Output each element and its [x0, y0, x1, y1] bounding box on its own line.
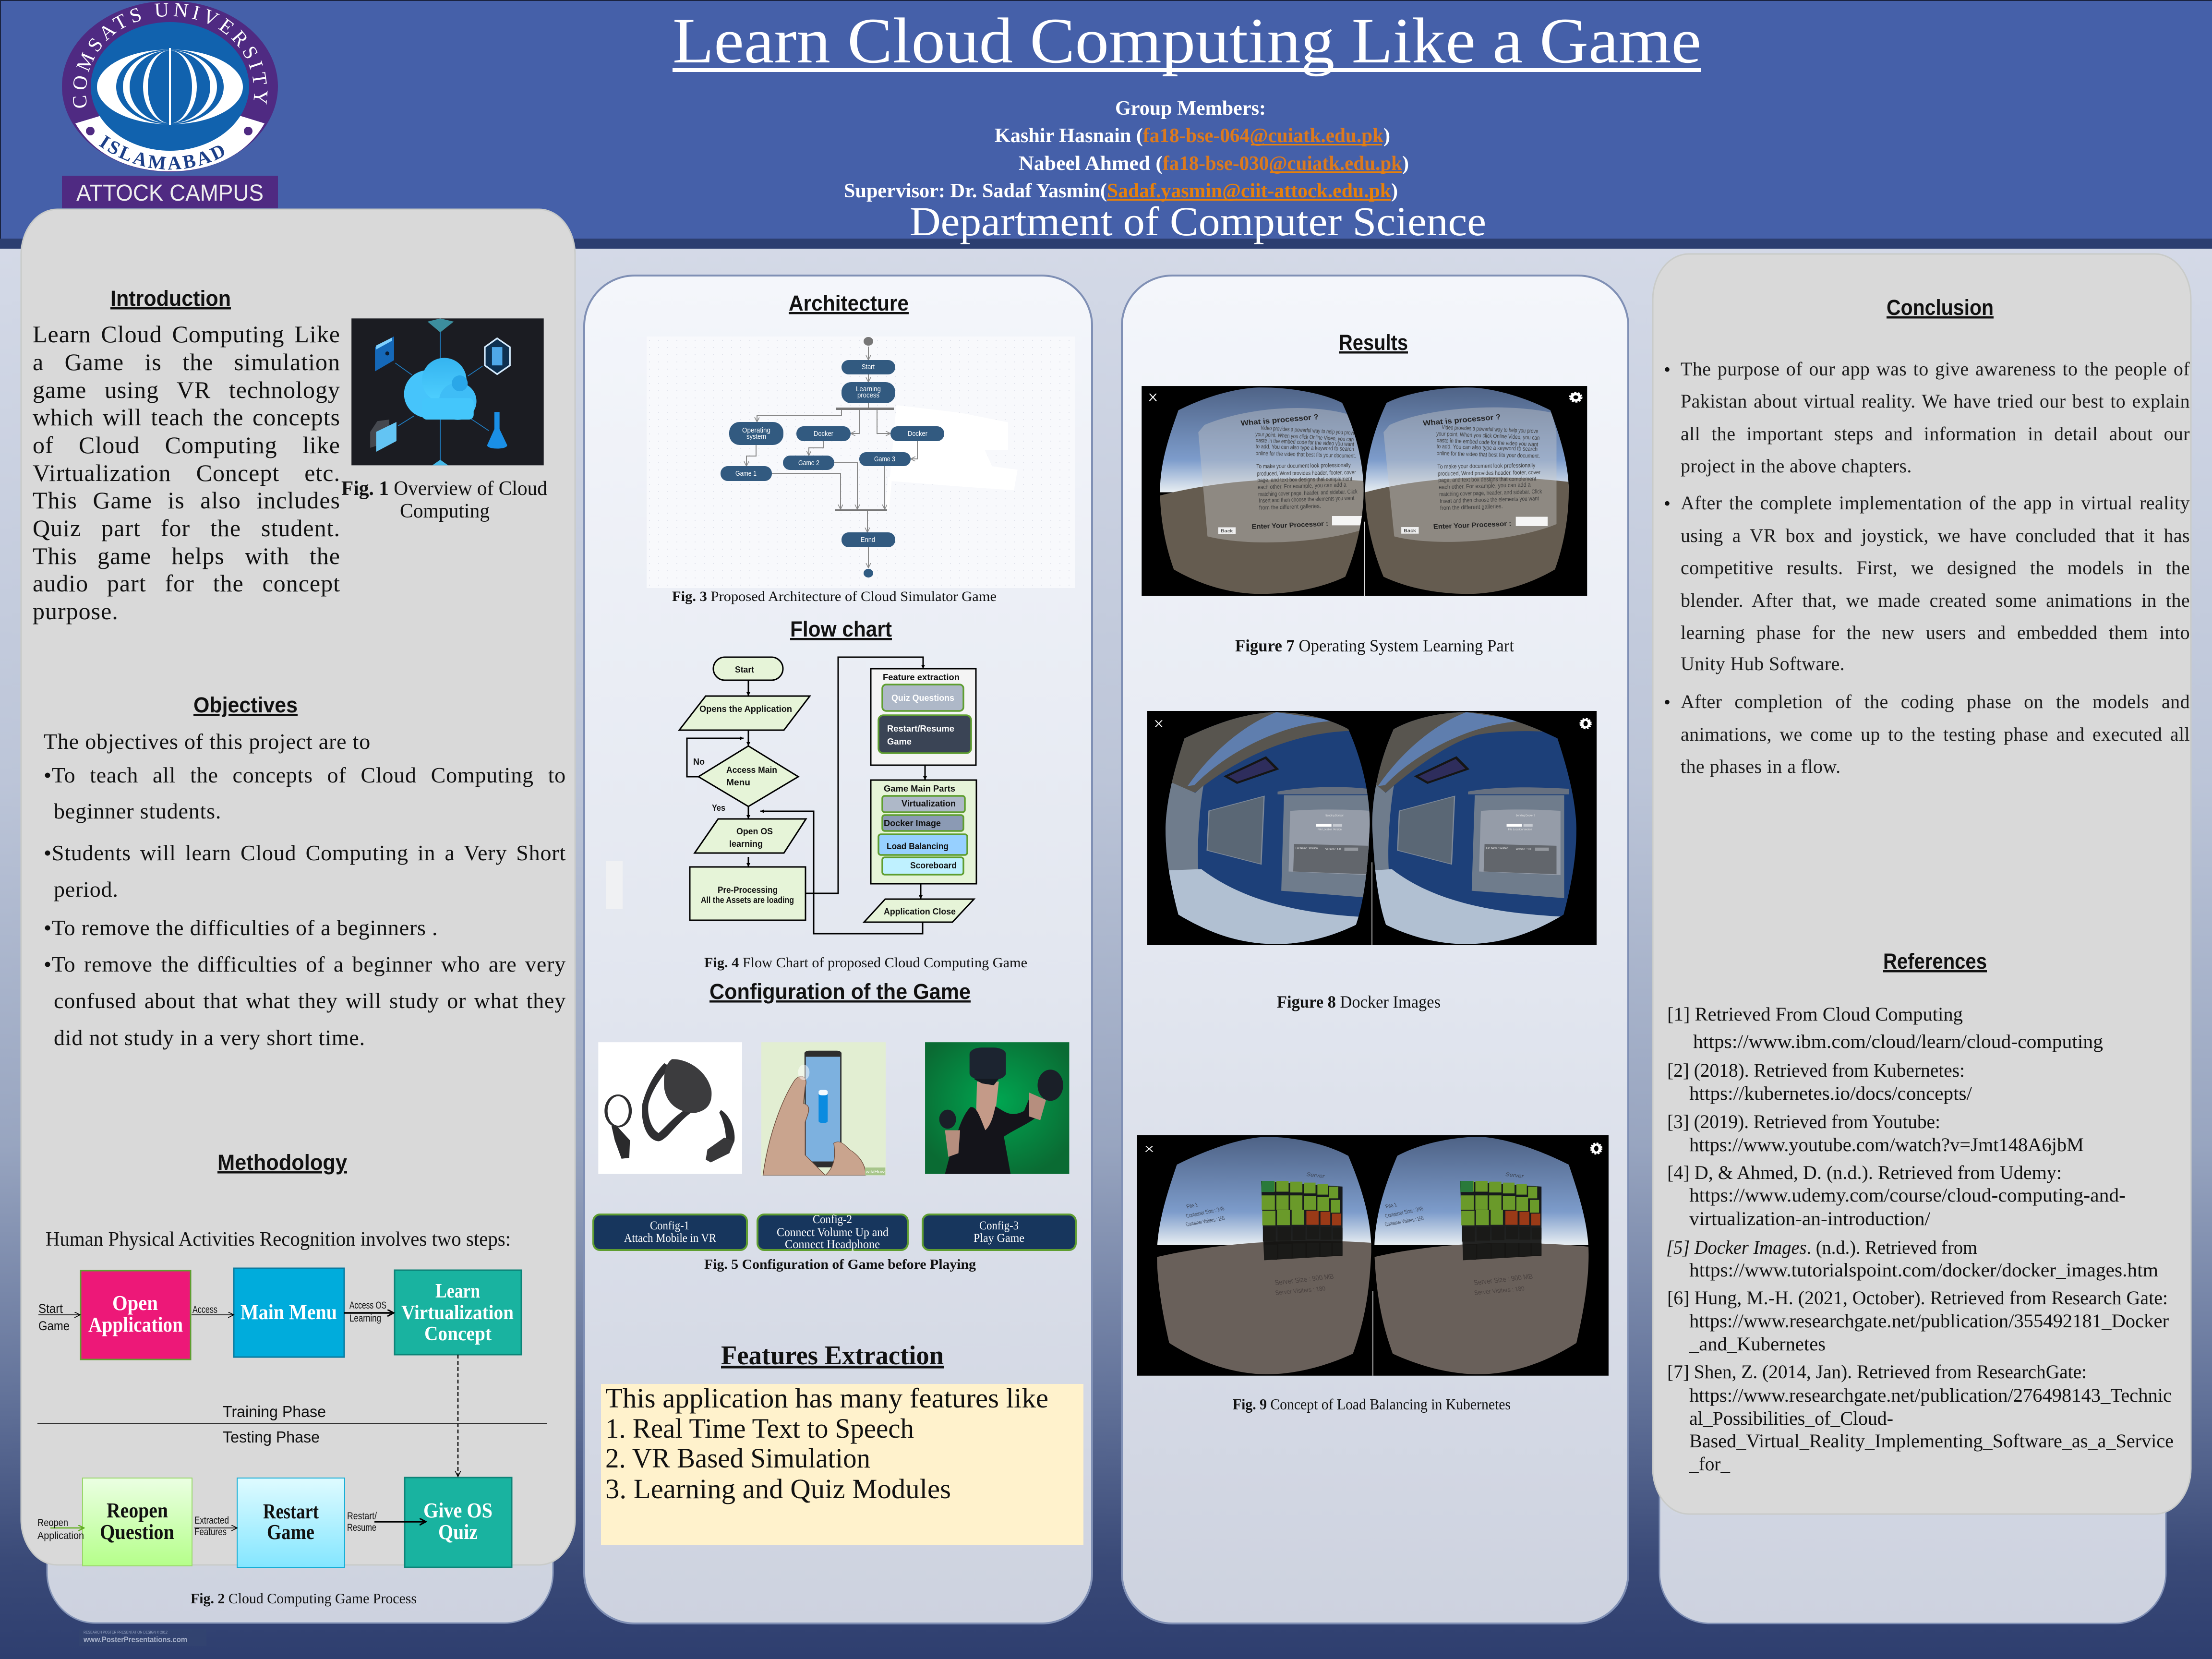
caption: figure 8: Figure 8 Docker Images [1277, 992, 1441, 1011]
figure 7: VR operating system learning screenshot: Enter Your Processor : [1433, 520, 1512, 531]
group members: Kashir Hasnain ( [995, 125, 1143, 147]
footer: poster presentations credit: www.PosterPresentations.com [83, 1635, 187, 1644]
flowchart: figure 4 [606, 657, 976, 934]
box: learn virtualization concept: Virtualization [401, 1302, 514, 1324]
caption: figure 5: Fig. 5 Configuration of Game before Playing [704, 1257, 976, 1272]
text block: conclusion paragraphs: blender. After that, we made created some animations in the [1681, 589, 2190, 611]
flowchart: figure 4: Load Balancing [887, 842, 949, 851]
flowchart: figure 4: Menu [726, 778, 750, 787]
arrow labels: Features [194, 1527, 227, 1538]
caption: figure 4: Fig. 4 Flow Chart of proposed Cloud Computing Game [704, 955, 1027, 971]
figure 9: VR load balancing screenshot: Container Visiters : 150 [1384, 1215, 1425, 1228]
flowchart: figure 4: Docker Image [884, 818, 941, 828]
box: learn virtualization concept: Learn [435, 1280, 480, 1302]
arrow labels: Reopen [37, 1517, 68, 1528]
config button 1: Config-1 [650, 1219, 689, 1232]
figure 8: VR docker images screenshot: File Location Version [1508, 828, 1532, 831]
heading: architecture: Architecture [789, 291, 909, 315]
references list: https://www.ibm.com/cloud/learn/cloud-computing [1693, 1031, 2103, 1052]
figure 9: VR load balancing screenshot: Server [1306, 1171, 1325, 1179]
arrow labels: Start [38, 1301, 63, 1316]
architecture diagram: figure 3: Game 3 [874, 455, 895, 463]
figure 8: VR docker images screenshot: Sending Docker ! [1325, 814, 1344, 817]
figure 7: VR operating system learning screenshot: online for the video that best fits your document. [1436, 449, 1540, 459]
references list: _for_ [1689, 1453, 1731, 1475]
logo: COMSATS University: COMSATS UNIVERSITY [73, 3, 268, 108]
architecture diagram: figure 3: process [857, 391, 879, 399]
features callout [601, 1382, 1083, 1545]
group members: Sadaf.yasmin@ciit-attock.edu.pk [1107, 180, 1392, 202]
arrow labels: Extracted [194, 1515, 229, 1526]
text block: conclusion paragraphs: project in the above chapters. [1681, 455, 1912, 477]
config button 3: Play Game [974, 1232, 1024, 1245]
text block: conclusion paragraphs: the phases in a flow. [1681, 756, 1840, 777]
references list: [2] (2018). Retrieved from Kubernetes: [1667, 1059, 1965, 1081]
panel: conclusion backing [1659, 276, 2166, 1623]
caption: figure 1: Computing [400, 500, 490, 522]
box: restart game: Game [267, 1520, 314, 1544]
references list: https://www.researchgate.net/publication/276498143_Technic [1689, 1384, 2172, 1406]
architecture diagram: figure 3: Ennd [861, 536, 875, 544]
panel: conclusion and references [1653, 254, 2191, 1514]
text block: conclusion paragraphs: The purpose of our app was to give awareness to the people of [1681, 358, 2190, 380]
box: open application [81, 1271, 191, 1359]
figure 7: VR operating system learning screenshot: Video provides a powerful way to help you prove [1261, 424, 1356, 436]
figure 7: VR operating system learning screenshot: matching cover page, header, and sidebar. Click [1258, 488, 1358, 497]
text block: objectives list: •To remove the difficulties of a beginner who are very [44, 952, 566, 976]
flowchart: figure 4: Scoreboard [910, 861, 957, 870]
text block: conclusion paragraphs: using a VR box and joystick, we have concluded that it has [1681, 525, 2190, 546]
text block: conclusion paragraphs: After completion of the coding phase on the models and [1681, 691, 2190, 712]
references list: virtualization-an-introduction/ [1689, 1208, 1931, 1229]
department heading: Department of Computer Science [910, 198, 1486, 244]
figure 7: VR operating system learning screenshot: each other. For example, you can add a [1257, 481, 1346, 491]
group members: ) [1391, 180, 1398, 202]
methodology intro line: Human Physical Activities Recognition involves two steps: [46, 1228, 511, 1250]
group members: Group Members: [1115, 97, 1266, 120]
text block: introduction paragraph: a Game is the simulation [33, 349, 340, 375]
text block: objectives list: The objectives of this project are to [44, 729, 371, 754]
text block: conclusion paragraphs: Pakistan about virtual reality. We have tried our best to explain [1681, 390, 2190, 412]
figure 7: VR operating system learning screenshot: page, and text box designs that complement [1257, 475, 1352, 483]
flowchart: figure 4: learning [729, 839, 763, 849]
box: open application: Application [88, 1313, 183, 1336]
architecture diagram: figure 3: Docker [814, 430, 833, 438]
text block: introduction paragraph [33, 321, 340, 625]
text block: introduction paragraph: This game helps with the [33, 542, 340, 569]
figure 7: VR operating system learning screenshot: paste in the embed code for the video you want [1255, 436, 1354, 447]
figure 9: VR load balancing screenshot: Container Size : 243 [1383, 1205, 1425, 1219]
box: learn virtualization concept: Concept [424, 1323, 492, 1345]
panel: figure 2 backing [47, 275, 553, 1623]
text block: conclusion paragraphs: After the complete implementation of the app in virtual reality [1681, 492, 2190, 514]
figure 7: VR operating system learning screenshot: each other. For example, you can add a [1439, 481, 1531, 491]
architecture diagram: figure 3: Learning [856, 385, 881, 393]
figure 7: VR operating system learning screenshot: online for the video that best fits your document. [1255, 449, 1356, 459]
text block: conclusion paragraphs: Unity Hub Software. [1681, 653, 1845, 674]
features callout: 2. VR Based Simulation [605, 1443, 870, 1474]
heading: flow chart: Flow chart [790, 617, 892, 641]
text block: introduction paragraph: Quiz part for the student. [33, 515, 340, 541]
config button 2: Connect Headphone [785, 1238, 880, 1251]
box: restart game [237, 1478, 345, 1567]
figure 9: VR load balancing screenshot: Server Size : 900 MB [1473, 1273, 1534, 1287]
box: learn virtualization concept [395, 1270, 521, 1355]
references list: Based_Virtual_Reality_Implementing_Software_as_a_Service [1689, 1430, 2174, 1452]
heading: results: Results [1339, 330, 1408, 355]
text block: conclusion paragraphs [1681, 0, 2190, 792]
conclusion bullets [1664, 359, 1671, 713]
text block: objectives list: •Students will learn Cloud Computing in a Very Short [44, 841, 566, 865]
arrow labels: Access [192, 1304, 217, 1315]
flowchart: figure 4: Opens the Application [699, 704, 792, 714]
heading: references: References [1883, 949, 1987, 974]
arrows [37, 1313, 547, 1528]
conclusion bullets: • [1664, 359, 1671, 380]
references list: [4] D, & Ahmed, D. (n.d.). Retrieved from Udemy: [1667, 1162, 2062, 1183]
arrow labels: Training Phase [223, 1403, 326, 1420]
box: reopen question: Question [100, 1520, 174, 1544]
box: reopen question [83, 1478, 192, 1566]
figure 9: VR load balancing screenshot: Server Visiters : 180 [1274, 1285, 1326, 1297]
architecture diagram: figure 3: Docker [908, 430, 927, 438]
figure 7: VR operating system learning screenshot: To make your document look professionally [1437, 462, 1536, 470]
arrow labels: Learning [349, 1313, 381, 1324]
group members: ) [1402, 153, 1409, 175]
config button 1 [593, 1214, 747, 1250]
footer: poster presentations credit: RESEARCH POSTER PRESENTATION DESIGN © 2012 [84, 1630, 168, 1635]
caption: figure 1 [341, 478, 547, 522]
flowchart: figure 4: Application Close [884, 907, 956, 916]
image: person playing in VR [925, 1042, 1069, 1174]
architecture diagram: figure 3: Start [862, 363, 875, 371]
references list: al_Possibilities_of_Cloud- [1689, 1407, 1893, 1429]
group members: Supervisor: Dr. Sadaf Yasmin( [844, 180, 1107, 202]
flowchart: figure 4: Access Main [726, 765, 777, 775]
text block: introduction paragraph: This Game is also includes [33, 487, 340, 514]
figure 9: VR load balancing screenshot: X [1145, 1144, 1154, 1154]
figure 8: VR docker images screenshot: File Name : location [1486, 846, 1508, 850]
text block: objectives list: beginner students. [54, 799, 221, 823]
architecture diagram: figure 3: system [746, 433, 766, 441]
figure 1: cloud overview image [351, 318, 544, 465]
figure 8: VR docker images screenshot [1147, 711, 1597, 946]
figure 7: VR operating system learning screenshot: from the different galleries. [1259, 503, 1321, 511]
process diagram: figure 2 [37, 1268, 547, 1567]
group members: fa18-bse-064@cuiatk.edu.pk [1143, 125, 1384, 147]
text block: conclusion paragraphs: competitive results. First, we designed the models in the [1681, 557, 2190, 578]
figure 7: VR operating system learning screenshot: your point. When you click Online Video, you can [1255, 431, 1354, 443]
logo: COMSATS University [62, 1, 278, 208]
text block: objectives list: confused about that what they will study or what they [54, 988, 566, 1013]
references list: [5] Docker Images. (n.d.). Retrieved from [1666, 1237, 1977, 1258]
text block: conclusion paragraphs: animations, we come up to the testing phase and executed all [1681, 723, 2190, 745]
config button 2 [757, 1213, 908, 1251]
flowchart: figure 4: Quiz Questions [891, 693, 954, 703]
figure 7: VR operating system learning screenshot: What is processor ? [1240, 412, 1319, 427]
panel: architecture column [584, 276, 1092, 1623]
flowchart: figure 4: Open OS [736, 827, 773, 836]
figure 9: VR load balancing screenshot: Container Size : 243 [1185, 1205, 1226, 1219]
box: main menu [234, 1268, 344, 1357]
flowchart: figure 4: Start [735, 665, 754, 674]
references list: [3] (2019). Retrieved from Youtube: [1667, 1111, 1940, 1132]
panel: introduction, objectives, methodology [21, 209, 575, 1565]
image: phone volume button: wikiHow [866, 1169, 885, 1174]
figure 7: VR operating system learning screenshot: Back [1221, 529, 1233, 534]
figure 8: VR docker images screenshot: File Location Version [1318, 828, 1342, 831]
flowchart: figure 4: Yes [712, 803, 725, 813]
text block: introduction paragraph: of Cloud Computing like [33, 432, 340, 458]
box: give os quiz [405, 1478, 512, 1567]
text block: introduction paragraph: audio part for the concept [33, 570, 340, 597]
figure 7: VR operating system learning screenshot: page, and text box designs that complement [1438, 475, 1537, 483]
text block: introduction paragraph: Learn Cloud Computing Like [33, 321, 340, 348]
flowchart: figure 4: No [693, 757, 705, 767]
config button 2: Connect Volume Up and [777, 1226, 889, 1239]
architecture diagram: figure 3 [647, 337, 1075, 588]
figure 7: VR operating system learning screenshot: What is processor ? [1422, 412, 1501, 427]
flowchart: figure 4: Feature extraction [883, 673, 960, 682]
figure 7: VR operating system learning screenshot: Insert and then choose the elements you want [1259, 494, 1355, 504]
heading: methodology: Methodology [217, 1150, 347, 1175]
flowchart: figure 4: Pre-Processing [718, 885, 778, 895]
flowchart: figure 4: All the Assets are loading [701, 895, 794, 905]
figure 9: VR load balancing screenshot: File 1 [1185, 1202, 1199, 1210]
figure 7: VR operating system learning screenshot: To make your document look professionally [1256, 461, 1351, 469]
configuration images [598, 1042, 1069, 1176]
figure 7: VR operating system learning screenshot: paste in the embed code for the video you want [1436, 436, 1539, 447]
text block: objectives list: period. [54, 877, 119, 902]
figure 9: VR load balancing screenshot: Container Visiters : 150 [1185, 1215, 1226, 1228]
text block: introduction paragraph: game using VR technology [33, 376, 340, 403]
caption: figure 3: Fig. 3 Proposed Architecture of Cloud Simulator Game [672, 589, 997, 604]
references list [1666, 1003, 2174, 1475]
config button 3 [923, 1214, 1076, 1250]
text block: conclusion paragraphs: learning phase for the new users and embedded them into [1681, 622, 2190, 643]
panel: results column [1122, 276, 1628, 1623]
arrow labels: Game [38, 1319, 70, 1333]
references list: https://kubernetes.io/docs/concepts/ [1689, 1082, 1972, 1104]
text block: objectives list: •To remove the difficulties of a beginners . [44, 915, 438, 940]
figure 7: VR operating system learning screenshot: Enter Your Processor : [1251, 520, 1328, 531]
references list: _and_Kubernetes [1689, 1333, 1826, 1355]
arrow labels: Restart/ [347, 1511, 377, 1522]
figure 8: VR docker images screenshot: File Name : location [1296, 846, 1318, 850]
arrow labels: Testing Phase [223, 1428, 320, 1446]
features callout: 3. Learning and Quiz Modules [605, 1473, 951, 1504]
flowchart: figure 4: Restart/Resume [887, 724, 954, 733]
figure 8: VR docker images screenshot: X [1154, 719, 1164, 730]
box: give os quiz: Give OS [423, 1499, 493, 1522]
figure 7: VR operating system learning screenshot: Back [1404, 529, 1417, 533]
references list: [7] Shen, Z. (2014, Jan). Retrieved from ResearchGate: [1667, 1361, 2087, 1382]
figure 7: VR operating system learning screenshot: Video provides a powerful way to help you prove [1442, 423, 1539, 434]
heading: introduction: Introduction [110, 286, 231, 311]
figure 7: VR operating system learning screenshot: X [1148, 392, 1157, 404]
heading: objectives: Objectives [193, 693, 298, 717]
logo: COMSATS University: ATTOCK CAMPUS [76, 180, 264, 206]
group members [844, 97, 1409, 202]
figure 9: VR load balancing screenshot: Server [1505, 1171, 1525, 1179]
figure 7: VR operating system learning screenshot: produced, Word provides header, footer, cover [1438, 469, 1541, 477]
flowchart: figure 4: Virtualization [902, 799, 956, 808]
features callout: 1. Real Time Text to Speech [605, 1413, 914, 1444]
arrow labels: Resume [347, 1522, 376, 1533]
image: VR headset and controllers [598, 1042, 742, 1174]
text block: introduction paragraph: purpose. [33, 598, 119, 625]
text block: introduction paragraph: which will teach the concepts [33, 404, 340, 431]
architecture diagram: figure 3: Operating [742, 426, 770, 434]
figure 9: VR load balancing screenshot: Server Size : 900 MB [1274, 1273, 1335, 1287]
figure 8: VR docker images screenshot: Sending Docker ! [1516, 814, 1535, 817]
flowchart: figure 4: Game Main Parts [884, 784, 955, 793]
header band [0, 0, 2212, 249]
text block: objectives list [44, 729, 566, 1050]
box: open application: Open [112, 1291, 158, 1315]
heading: conclusion: Conclusion [1887, 295, 1994, 320]
figure 7: VR operating system learning screenshot [1142, 385, 1587, 596]
arrow labels: Access OS [349, 1300, 386, 1311]
title: Learn Cloud Computing Like a Game [673, 5, 1701, 77]
caption: figure 1: Fig. 1 Overview of Cloud [341, 478, 547, 500]
figure 7: VR operating system learning screenshot: produced, Word provides header, footer, cover [1257, 469, 1356, 477]
caption: figure 7: Figure 7 Operating System Learning Part [1235, 636, 1514, 655]
box: main menu: Main Menu [240, 1300, 337, 1324]
conclusion bullets: • [1664, 493, 1671, 514]
box: give os quiz: Quiz [438, 1520, 478, 1544]
figure 9: VR load balancing screenshot [1137, 1135, 1609, 1376]
text block: introduction paragraph: Virtualization Concept etc. [33, 459, 340, 486]
conclusion bullets: • [1664, 691, 1671, 713]
references list: https://www.youtube.com/watch?v=Jmt148A6jbM [1689, 1134, 2084, 1155]
arrow labels [37, 1300, 386, 1541]
image: phone volume button [761, 1042, 886, 1176]
figure 9: VR load balancing screenshot: File 1 [1384, 1202, 1398, 1210]
figure 7: VR operating system learning screenshot: to add. You can also type a keyword to search [1436, 443, 1538, 452]
references list: [6] Hung, M.-H. (2021, October). Retrieved from Research Gate: [1667, 1287, 2168, 1309]
group members: ) [1383, 125, 1390, 147]
group members: fa18-bse-030@cuiatk.edu.pk [1163, 153, 1403, 175]
references list: https://www.udemy.com/course/cloud-computing-and- [1689, 1184, 2126, 1206]
config button 2: Config-2 [813, 1213, 852, 1226]
figure 7: VR operating system learning screenshot: your point. When you click Online Video, you can [1436, 430, 1540, 441]
figure 8: VR docker images screenshot: Version : 1.0 [1516, 848, 1531, 851]
text block: objectives list: did not study in a very short time. [54, 1025, 365, 1050]
arrow labels: Application [37, 1530, 84, 1541]
config button 1: Attach Mobile in VR [624, 1232, 716, 1245]
box: restart game: Restart [263, 1500, 319, 1523]
architecture diagram: figure 3: Game 2 [798, 459, 819, 467]
references list: https://www.researchgate.net/publication/355492181_Docker [1689, 1310, 2169, 1332]
figure 7: VR operating system learning screenshot: matching cover page, header, and sidebar. Click [1439, 488, 1542, 497]
flowchart: figure 4: Game [887, 737, 912, 746]
features callout: This application has many features like [605, 1382, 1048, 1414]
figure 9: VR load balancing screenshot: Server Visiters : 180 [1474, 1285, 1525, 1297]
figure 7: VR operating system learning screenshot: Insert and then choose the elements you want [1440, 495, 1539, 505]
footer: poster presentations credit [79, 1629, 206, 1646]
group members: Nabeel Ahmed ( [1019, 153, 1163, 175]
references list: [1] Retrieved From Cloud Computing [1667, 1003, 1963, 1025]
heading: features extraction: Features Extraction [721, 1341, 944, 1370]
box: reopen question: Reopen [107, 1499, 168, 1522]
logo: COMSATS University: ISLAMABAD [99, 135, 224, 170]
config button 3: Config-3 [979, 1219, 1019, 1232]
heading: configuration of the game: Configuration of the Game [709, 979, 971, 1004]
figure 8: VR docker images screenshot: Version : 1.0 [1325, 848, 1341, 851]
text block: conclusion paragraphs: all the important steps and information in detail about our [1681, 423, 2190, 445]
figure 7: VR operating system learning screenshot: to add. You can also type a keyword to search [1255, 443, 1354, 452]
references list: https://www.tutorialspoint.com/docker/docker_images.htm [1689, 1259, 2158, 1281]
text block: objectives list: •To teach all the concepts of Cloud Computing to [44, 763, 566, 787]
caption: figure 9: Fig. 9 Concept of Load Balancing in Kubernetes [1233, 1395, 1511, 1413]
caption: figure 2: Fig. 2 Cloud Computing Game Process [191, 1590, 417, 1607]
architecture diagram: figure 3: Game 1 [735, 469, 757, 478]
figure 7: VR operating system learning screenshot: from the different galleries. [1440, 503, 1503, 511]
